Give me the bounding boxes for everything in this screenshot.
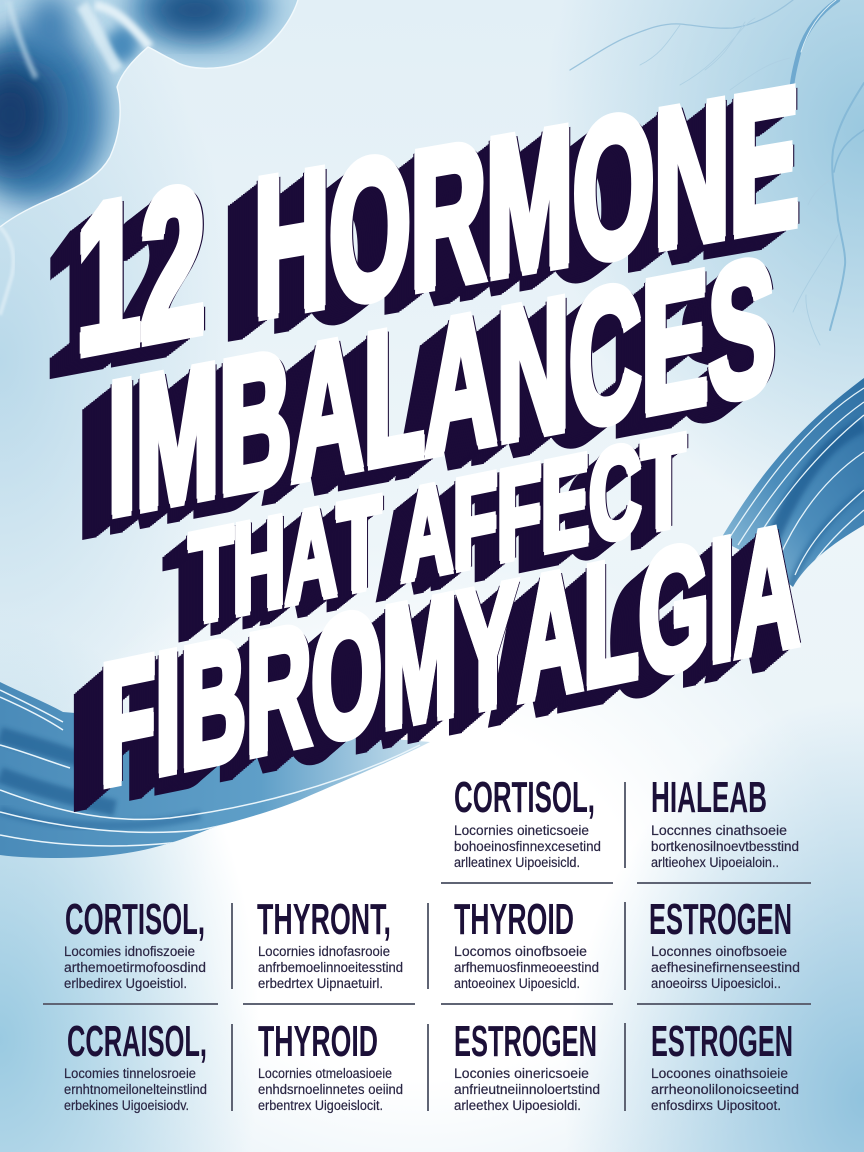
card: Cortisol, row 1 column 3: CORTISOL, — [454, 774, 595, 822]
card: Thyront, row 2 column 2: THYRONT, — [257, 896, 391, 944]
card: Hialeab, row 1 column 4: arltieohex Uipoeialoin.. — [651, 855, 779, 870]
title line 2: IMBALANCES — [108, 217, 775, 556]
title: 12 Hormone Imbalances That Affect Fibromyalgia — [50, 45, 802, 822]
card: Estrogen, row 3 column 4: arrheonolilonoicseetind — [651, 1082, 799, 1097]
card: Thyroid, row 3 column 2: erbentrex Uigoeislocit. — [258, 1098, 383, 1113]
card: Hialeab, row 1 column 4 — [651, 774, 799, 870]
title line 3: THAT AFFECT — [189, 407, 685, 652]
title line 1: 12: 12 — [76, 140, 205, 399]
card: Thyront, row 2 column 2: erbedrtex Uipnaetuirl. — [258, 976, 383, 991]
card: Cortisol, row 2 column 1: erlbedirex Ugoeistiol. — [64, 976, 187, 991]
card: Hialeab, row 1 column 4: HIALEAB — [651, 774, 767, 822]
card: Ccraisol, row 3 column 1: erbekines Uigoeisiodv. — [64, 1098, 189, 1113]
card: Estrogen, row 3 column 3: Loconies oinericsoeie — [454, 1066, 589, 1081]
card: Estrogen, row 2 column 4: Loconnes oinofbsoeie — [651, 944, 787, 959]
wave right — [715, 375, 864, 590]
card: Ccraisol, row 3 column 1: Locomies tinnelosroeie — [64, 1066, 196, 1081]
title line 4: FIBROMYALGIA — [100, 488, 800, 822]
card: Thyroid, row 2 column 3 — [454, 896, 599, 991]
card: Cortisol, row 2 column 1: CORTISOL, — [65, 896, 205, 944]
card: Ccraisol, row 3 column 1 — [64, 1018, 207, 1113]
card: Thyront, row 2 column 2: anfrbemoelinnoeitesstind — [258, 960, 403, 975]
card: Hialeab, row 1 column 4: Loccnnes cinathsoeie — [651, 823, 787, 838]
card: Thyroid, row 3 column 2: enhdsrnoelinnetes oeiind — [258, 1082, 403, 1097]
card: Hialeab, row 1 column 4: bortkenosilnoevtbesstind — [651, 839, 799, 854]
card: Thyroid, row 2 column 3: antoeoinex Uipoesicld. — [454, 976, 580, 991]
card: Thyront, row 2 column 2: Locornies idnofasrooie — [258, 944, 390, 959]
card: Estrogen, row 3 column 4: enfosdirxs Uipositoot. — [651, 1098, 781, 1113]
card: Estrogen, row 3 column 3 — [454, 1018, 600, 1113]
veins top right — [570, 0, 864, 345]
card: Ccraisol, row 3 column 1: ernhtnomeilonelteinstlind — [64, 1082, 207, 1097]
card: Cortisol, row 2 column 1: Locomies idnofiszoeie — [64, 944, 195, 959]
card: Estrogen, row 3 column 3: anfrieutneiinnoloertstind — [454, 1082, 600, 1097]
card: Thyroid, row 2 column 3: arfhemuosfinmeoeestind — [454, 960, 599, 975]
card: Cortisol, row 1 column 3 — [454, 774, 601, 870]
card: Cortisol, row 1 column 3: bohoeinosfinnexcesetind — [454, 839, 601, 854]
card: Estrogen, row 2 column 4 — [649, 896, 800, 991]
grid dividers — [43, 782, 811, 1111]
card: Estrogen, row 2 column 4: aefhesinefirnenseestind — [651, 960, 800, 975]
card: Thyroid, row 2 column 3: THYROID — [454, 896, 574, 944]
card: Estrogen, row 3 column 3: ESTROGEN — [454, 1018, 597, 1066]
card: Estrogen, row 2 column 4: anoeoirss Uipoesicloi.. — [651, 976, 781, 991]
card: Thyroid, row 3 column 2: THYROID — [258, 1018, 378, 1066]
card: Estrogen, row 3 column 4: Locoones oinathsoieie — [651, 1066, 788, 1081]
card: Cortisol, row 1 column 3: Locornies oineticsoeie — [454, 823, 589, 838]
card: Thyroid, row 2 column 3: Locomos oinofbsoeie — [454, 944, 587, 959]
card: Cortisol, row 2 column 1: arthemoetirmofoosdind — [64, 960, 206, 975]
card: Estrogen, row 3 column 4 — [651, 1018, 799, 1113]
card: Thyroid, row 3 column 2 — [258, 1018, 403, 1113]
title line 1: Hormone: HORMONE — [254, 45, 799, 360]
background artwork — [0, 0, 864, 858]
card: Cortisol, row 2 column 1 — [64, 896, 206, 991]
shape: blue body silhouette top left — [0, 0, 300, 230]
card: Ccraisol, row 3 column 1: CCRAISOL, — [67, 1018, 207, 1066]
card: Cortisol, row 1 column 3: arlleatinex Uipoeisicld. — [454, 855, 580, 870]
card: Estrogen, row 3 column 3: arleethex Uipoesioldi. — [454, 1098, 581, 1113]
wave left — [0, 680, 435, 860]
card: Thyront, row 2 column 2 — [257, 896, 403, 991]
card: Thyroid, row 3 column 2: Locornies otmeloasioeie — [258, 1066, 392, 1081]
